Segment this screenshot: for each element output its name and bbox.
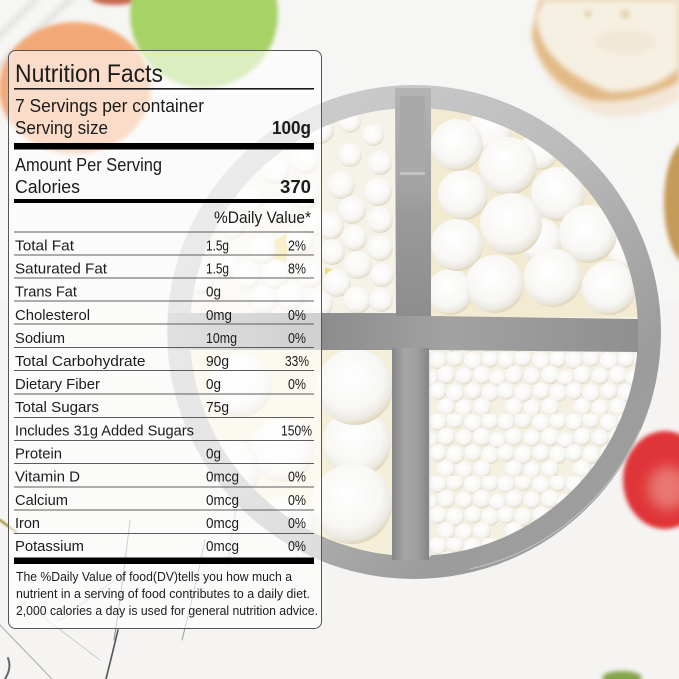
row: saturated fat	[15, 260, 306, 278]
row: cholesterol: Cholesterol	[15, 307, 90, 324]
nutrition facts panel	[8, 50, 322, 628]
footnote: The %Daily Value of food(DV)tells you how much a	[16, 570, 292, 584]
row: iron: Iron	[15, 515, 40, 532]
cross divider: vertical top arm	[395, 88, 431, 316]
footnote: nutrient in a serving of food contributes to a daily diet.	[16, 587, 310, 601]
calories block: Calories	[15, 177, 80, 197]
row: vitamin d: 0mcg	[206, 468, 239, 486]
sketch lines	[0, 495, 238, 679]
footnote	[16, 570, 318, 618]
cookie right edge	[664, 140, 679, 264]
cupcake top right	[532, 0, 679, 117]
row: cholesterol: 0%	[288, 307, 306, 324]
tin outer ring	[167, 85, 661, 579]
servings info	[15, 96, 311, 138]
row: added sugars	[15, 422, 312, 440]
row: sodium: 10mg	[206, 330, 237, 347]
row: total fat	[15, 238, 306, 254]
bottom-right compartment: tiny pearls	[428, 350, 643, 565]
row: saturated fat: Saturated Fat	[15, 260, 108, 278]
row: calcium	[15, 492, 306, 509]
footnote: 2,000 calories a day is used for general nutrition advice.	[16, 604, 318, 618]
row: saturated fat: 8%	[288, 260, 306, 278]
row: potassium: Potassium	[15, 538, 84, 555]
row: dietary fiber	[15, 376, 306, 393]
row: cholesterol: 0mg	[206, 307, 232, 324]
row: added sugars: Includes 31g Added Sugars	[15, 422, 194, 440]
fork shadow top left	[0, 0, 75, 70]
row: trans fat: 0g	[206, 284, 221, 300]
bottom-left compartment: big pearls	[220, 350, 392, 555]
servings info: 7 Servings per container	[15, 96, 204, 116]
orange macaron	[0, 22, 151, 154]
title: Nutrition Facts	[15, 60, 163, 88]
row: total sugars: 75g	[206, 399, 229, 416]
row: trans fat	[15, 284, 221, 300]
cross divider: horizontal bar	[168, 313, 638, 352]
top-left compartment: medium pearls	[195, 109, 394, 313]
row: vitamin d	[15, 468, 306, 486]
calories block: 370	[280, 177, 311, 197]
servings info: 100g	[272, 118, 311, 138]
daily value header: %Daily Value*	[214, 208, 311, 227]
red fruit right	[623, 431, 679, 529]
row: dietary fiber: Dietary Fiber	[15, 376, 100, 393]
container: round tin with pearl sprinkles	[167, 85, 661, 579]
row: iron: 0%	[288, 515, 306, 532]
green leaf bottom right	[602, 671, 642, 679]
top-right compartment: large pearls	[427, 105, 643, 317]
row: total fat: 1.5g	[206, 238, 229, 254]
row: protein: 0g	[206, 446, 221, 462]
row: calcium: 0mcg	[206, 492, 239, 509]
row: total fat: Total Fat	[15, 238, 75, 254]
row: sodium: 0%	[288, 330, 306, 347]
row: dietary fiber: 0%	[288, 376, 306, 393]
row: trans fat: Trans Fat	[15, 284, 78, 300]
row: dietary fiber: 0g	[206, 376, 221, 393]
green macaron	[130, 0, 278, 88]
row: saturated fat: 1.5g	[206, 260, 229, 278]
row: protein	[15, 446, 221, 462]
row: vitamin d: 0%	[288, 468, 306, 486]
row: total carbohydrate	[15, 353, 309, 370]
row: potassium	[15, 538, 306, 555]
row: total fat: 2%	[288, 238, 306, 254]
calories block	[15, 155, 311, 197]
red macaron edge	[91, 0, 139, 5]
row: sodium: Sodium	[15, 330, 65, 347]
servings info: Serving size	[15, 118, 108, 138]
row: total carbohydrate: 33%	[285, 353, 309, 370]
row: potassium: 0%	[288, 538, 306, 555]
row: iron	[15, 515, 306, 532]
row: total sugars: Total Sugars	[15, 399, 99, 416]
row: sodium	[15, 330, 306, 347]
row: total carbohydrate: 90g	[206, 353, 229, 370]
row: vitamin d: Vitamin D	[15, 468, 80, 486]
row: cholesterol	[15, 307, 306, 324]
row: total sugars	[15, 399, 229, 416]
row: added sugars: 150%	[281, 422, 312, 440]
calories block: Amount Per Serving	[15, 155, 162, 175]
row: calcium: Calcium	[15, 492, 68, 509]
row: potassium: 0mcg	[206, 538, 239, 555]
cross divider: vertical bottom arm	[392, 348, 429, 560]
row: iron: 0mcg	[206, 515, 239, 532]
pearls clipped to the window	[180, 100, 643, 565]
nutrient table	[14, 232, 314, 555]
row: calcium: 0%	[288, 492, 306, 509]
row: protein: Protein	[15, 446, 62, 462]
panel background	[8, 50, 322, 628]
row: total carbohydrate: Total Carbohydrate	[15, 353, 146, 370]
